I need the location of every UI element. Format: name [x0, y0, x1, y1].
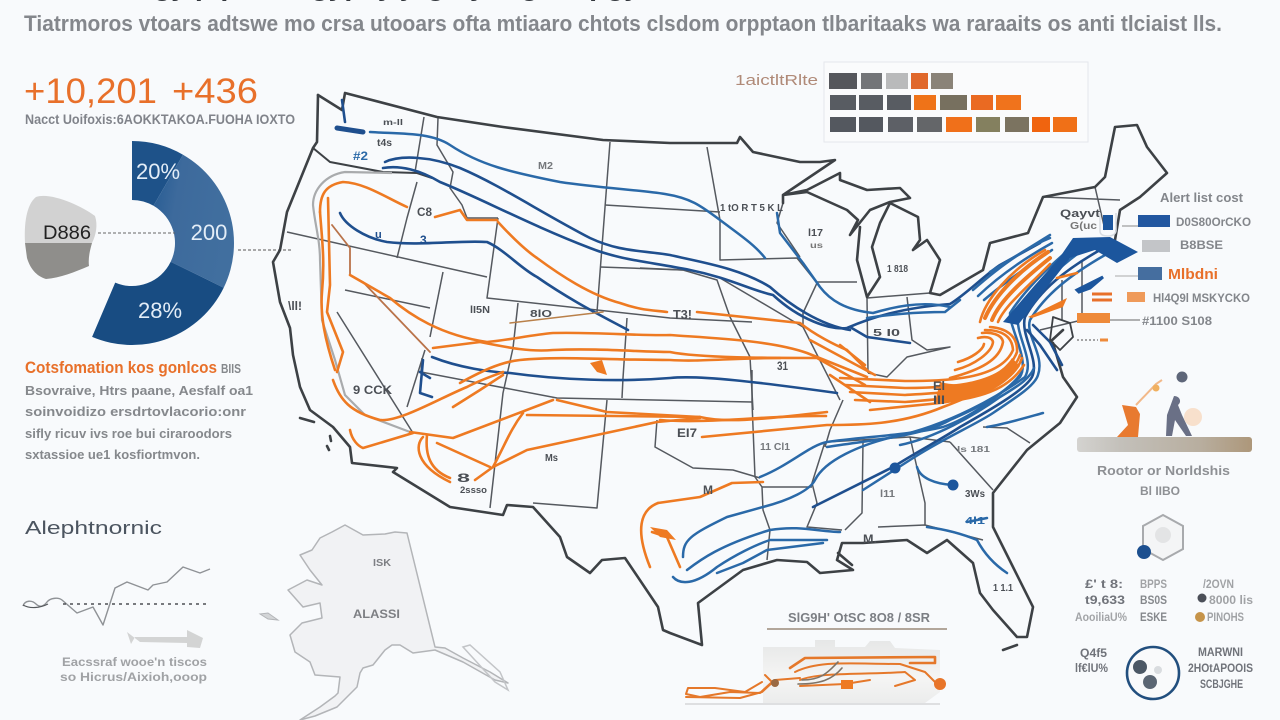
column 2: BPPS — [1140, 577, 1167, 591]
state boundaries — [287, 117, 1120, 560]
subtitle: Tiatrmoros vtoars adtswe mo crsa utooars ofta mtiaaro chtots clsdom orpptaon tlbaritaaks wa raraaits os anti tlciaist lls. — [24, 11, 1222, 36]
stat: first value: +10,201 — [24, 72, 157, 111]
swatch label: 1aictltRlte — [735, 72, 818, 89]
map: contiguous US — [273, 93, 1167, 650]
icon: chart arrow — [127, 630, 203, 648]
donut label: 28%: 28% — [138, 298, 182, 323]
column 2: ESKE — [1140, 610, 1167, 624]
coastline: west — [273, 95, 1077, 645]
pipelines: orange mid-Atlantic arcs — [840, 250, 1077, 410]
Alaska island — [260, 613, 278, 620]
description heading: Cotsfomation kos gonlcos — [25, 358, 217, 377]
icon: circular emblem — [1075, 645, 1253, 699]
swatch row 1 — [829, 73, 953, 89]
northeast connectors — [973, 235, 1052, 300]
column 2: BS0S — [1140, 593, 1167, 607]
swatch row 2 — [830, 95, 1021, 110]
Lake Michigan and Michigan outline — [857, 125, 1167, 297]
legend item 5 — [1077, 313, 1212, 328]
map labels: 1 818 — [887, 264, 908, 275]
map labels: G(uc — [1070, 221, 1098, 232]
map labels: ls 181 — [957, 445, 991, 454]
map labels: 1 tO R T 5 K L — [720, 203, 783, 214]
caption line 2: Bl IIBO — [1140, 484, 1180, 498]
map labels: 11 Cl1 — [760, 442, 790, 453]
Alaska panhandle — [463, 645, 508, 690]
donut chart — [92, 141, 234, 345]
caption line 1: Rootor or Norldshis — [1097, 463, 1230, 478]
Florida keys and islands — [300, 418, 1017, 650]
map labels: III — [933, 393, 945, 407]
grey callout blob — [25, 196, 96, 279]
mini nodes — [934, 678, 946, 690]
stat caption: Nacct Uoifoxis:6AOKKTAKOA.FUOHA IOXTO — [25, 112, 295, 127]
map labels: l17 — [808, 228, 823, 239]
donut segment: middle — [154, 155, 234, 288]
description line 2: soinvoidizo ersdrtovlacorio:onr — [25, 404, 246, 419]
legend item 6 — [1077, 339, 1098, 341]
description heading suffix: BIIS — [221, 361, 241, 376]
pipelines: blue south and east — [673, 235, 1138, 582]
grey inner coast line — [313, 172, 410, 432]
emblem left text 2: lf€lU% — [1075, 661, 1108, 675]
emblem left text 1: Q4f5 — [1080, 646, 1107, 660]
map labels: lI5N — [470, 305, 490, 316]
data table: bottom right — [1075, 577, 1253, 624]
map labels: #2 — [353, 149, 368, 163]
mini network — [686, 657, 938, 698]
emblem right text 1: MARWNI — [1198, 645, 1243, 659]
national outline — [318, 93, 910, 235]
map labels: T3! — [673, 307, 692, 322]
orange worker — [1117, 405, 1140, 437]
map labels: u — [375, 229, 382, 241]
swatch row 3 — [830, 117, 1077, 132]
map labels: us — [810, 241, 824, 250]
map labels: 8lO — [530, 309, 552, 320]
legend item 4: Hl4Q9l MSKYCKO — [1153, 291, 1250, 305]
Chesapeake lines — [1027, 325, 1062, 370]
donut segment: bottom — [92, 262, 224, 345]
column 2 — [1140, 577, 1167, 624]
chart caption line 1: Eacssraf wooe'n tiscos — [62, 655, 207, 669]
donut segment: top — [132, 141, 183, 206]
legend item 5: #1100 S108 — [1142, 314, 1212, 328]
mini backdrop — [763, 640, 940, 703]
peach disc — [1184, 408, 1202, 426]
donut label: 20%: 20% — [136, 159, 180, 184]
description line 1: Bsovraive, Htrs paane, Aesfalf oa1 — [25, 383, 253, 398]
callout label: D886 — [43, 223, 91, 244]
donut label: 200: 200 — [191, 220, 227, 245]
stat: second value: +436 — [172, 72, 258, 111]
legend item 2 — [1142, 238, 1223, 252]
base bar — [1077, 437, 1252, 452]
legend item 2: B8BSE — [1180, 238, 1223, 252]
map labels: 2ssso — [460, 485, 488, 495]
map labels: 3Ws — [965, 489, 985, 500]
map labels: M. — [863, 532, 877, 546]
legend item 3 — [1115, 266, 1218, 283]
column 1: AooiliaU% — [1075, 610, 1127, 624]
Gulf delta — [838, 330, 1063, 565]
map labels: t4s — [377, 138, 392, 149]
map labels: Qayvt — [1060, 208, 1100, 220]
map labels: m-ll — [383, 118, 403, 127]
map labels: M2 — [538, 161, 553, 172]
panel: key statistics — [24, 72, 295, 127]
map labels: l11 — [880, 489, 895, 500]
legend item 3: Mlbdni — [1168, 266, 1218, 283]
map labels: EI7 — [677, 426, 697, 440]
column 1: t9,633 — [1085, 593, 1125, 607]
Washington and Oregon border — [313, 148, 432, 178]
map labels: 8 — [457, 471, 471, 485]
blue-grey worker — [1166, 396, 1192, 436]
section heading: line chart: Alephtnornic — [25, 518, 162, 538]
pipelines: orange west — [320, 182, 1013, 567]
mini heading: SlG9H' OtSC 8O8 / 8SR — [788, 610, 931, 625]
orange Delaware wedge — [1028, 298, 1067, 318]
table: legend swatches — [735, 62, 1088, 142]
map: Alaska inset — [260, 525, 508, 720]
legend item 1 — [1122, 215, 1251, 229]
emblem right text 2: 2HOtAPOOIS — [1188, 661, 1253, 675]
map labels: 1 1.1 — [993, 583, 1013, 594]
column 1: £' t 8: — [1085, 577, 1123, 591]
pipeline nodes — [890, 462, 900, 474]
pipelines: blue north — [337, 100, 1040, 397]
map labels: \ll! — [288, 299, 302, 313]
column 3: 8000 lis — [1209, 593, 1253, 607]
legend item 4 — [1092, 291, 1250, 305]
text block: description — [25, 358, 253, 462]
Alaska label upper: ISK — [373, 558, 392, 569]
map labels: 31 — [777, 359, 788, 373]
emblem right text 3: SCBJGHE — [1200, 677, 1243, 691]
map labels: 5 I0 — [873, 328, 901, 339]
mini map: bottom pipeline inset — [685, 610, 947, 704]
column 3: PINOHS — [1207, 610, 1244, 624]
icon: workers on bar — [1077, 372, 1252, 498]
orange wedge — [590, 360, 607, 375]
map labels: 4l1 — [965, 516, 986, 527]
column 1 — [1075, 577, 1127, 624]
description line 3: sifly ricuv ivs roe bui ciraroodors — [25, 426, 232, 441]
map labels: Ms — [545, 453, 558, 464]
legend: right side key — [1077, 190, 1251, 340]
description line 4: sxtassioe ue1 kosfiortmvon. — [25, 447, 200, 462]
map labels — [288, 118, 1116, 594]
map labels: 9 CCK — [353, 383, 392, 397]
map labels: 3 — [420, 233, 427, 247]
map labels: El — [933, 379, 945, 393]
Alaska label lower: ALASSI — [353, 607, 400, 621]
Long Island — [1077, 277, 1103, 292]
orange mass — [935, 358, 1020, 402]
legend heading: Alert list cost — [1160, 190, 1244, 205]
legend item 1: D0S80OrCKO — [1176, 215, 1251, 229]
column 3 — [1195, 577, 1253, 624]
icon: hexagon badge — [1137, 515, 1183, 560]
map labels: M — [703, 483, 713, 497]
map labels: C8 — [417, 205, 432, 219]
column 3: /2OVN — [1203, 577, 1234, 591]
chart caption line 2: so Hicrus/Aixioh,ooop — [60, 670, 207, 684]
line chart — [23, 567, 210, 684]
northeast blue mass — [1003, 237, 1138, 325]
